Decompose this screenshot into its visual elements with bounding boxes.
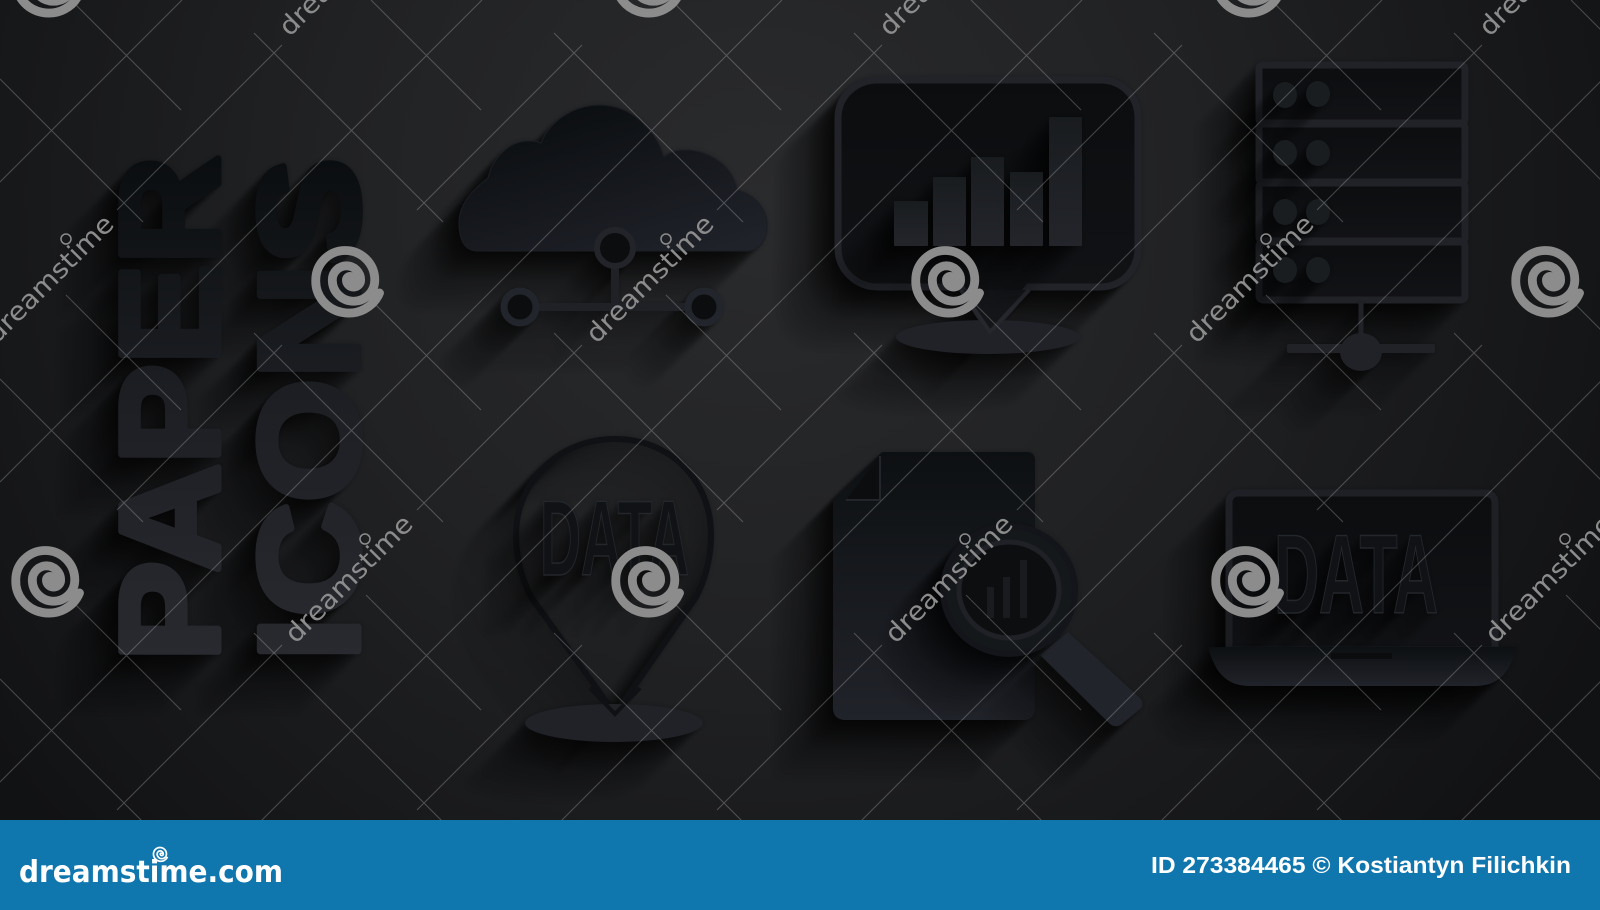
lens bar chart <box>987 560 1027 618</box>
folded corner <box>846 456 880 500</box>
footer banner <box>0 820 1600 910</box>
bar chart <box>894 117 1082 246</box>
base ellipse <box>525 704 703 742</box>
pin outline <box>516 439 711 714</box>
screen label: DATA <box>1274 512 1438 637</box>
title: paper icons lettering <box>91 156 389 661</box>
center node <box>597 230 633 266</box>
trackpad notch <box>1331 653 1392 659</box>
logo spiral <box>153 848 168 861</box>
bubble tail <box>961 290 1029 332</box>
icon: server rack <box>1259 65 1465 371</box>
icon: chart speech bubble pin <box>838 80 1138 354</box>
pin label: DATA <box>540 478 689 598</box>
magnifier lens <box>943 526 1075 654</box>
watermark wordmarks: dreamstime <box>580 209 720 349</box>
left node <box>504 291 536 323</box>
base ellipse <box>896 320 1080 354</box>
network stand <box>1287 303 1435 371</box>
icon: data location pin <box>516 439 711 742</box>
watermark wordmarks <box>0 0 1600 649</box>
network connector <box>535 262 695 307</box>
word: paper: PAPER <box>91 156 248 661</box>
icon: cloud network <box>459 105 767 323</box>
word: icons: ICONS <box>230 158 389 661</box>
bubble outline <box>838 80 1138 332</box>
right node <box>688 291 720 323</box>
pin tip <box>590 688 640 714</box>
image credit: ID 273384465 © Kostiantyn Filichkin <box>1151 852 1571 878</box>
icon: data laptop <box>1208 493 1517 686</box>
watermark wordmarks: dreamstime <box>279 509 419 649</box>
watermark spirals <box>16 0 1579 613</box>
server rows <box>1259 65 1465 300</box>
laptop base <box>1208 647 1517 686</box>
watermark wordmarks: dreamstime <box>879 509 1019 649</box>
document sheet <box>833 452 1035 720</box>
status lights <box>1273 81 1330 283</box>
laptop screen <box>1229 493 1495 650</box>
brand logo: dreamstime.com <box>19 855 283 890</box>
watermark wordmarks: dreamstime <box>1180 209 1320 349</box>
cloud shape <box>459 105 767 251</box>
icon: document with magnifier <box>833 452 1142 726</box>
magnifier handle <box>1040 632 1142 726</box>
